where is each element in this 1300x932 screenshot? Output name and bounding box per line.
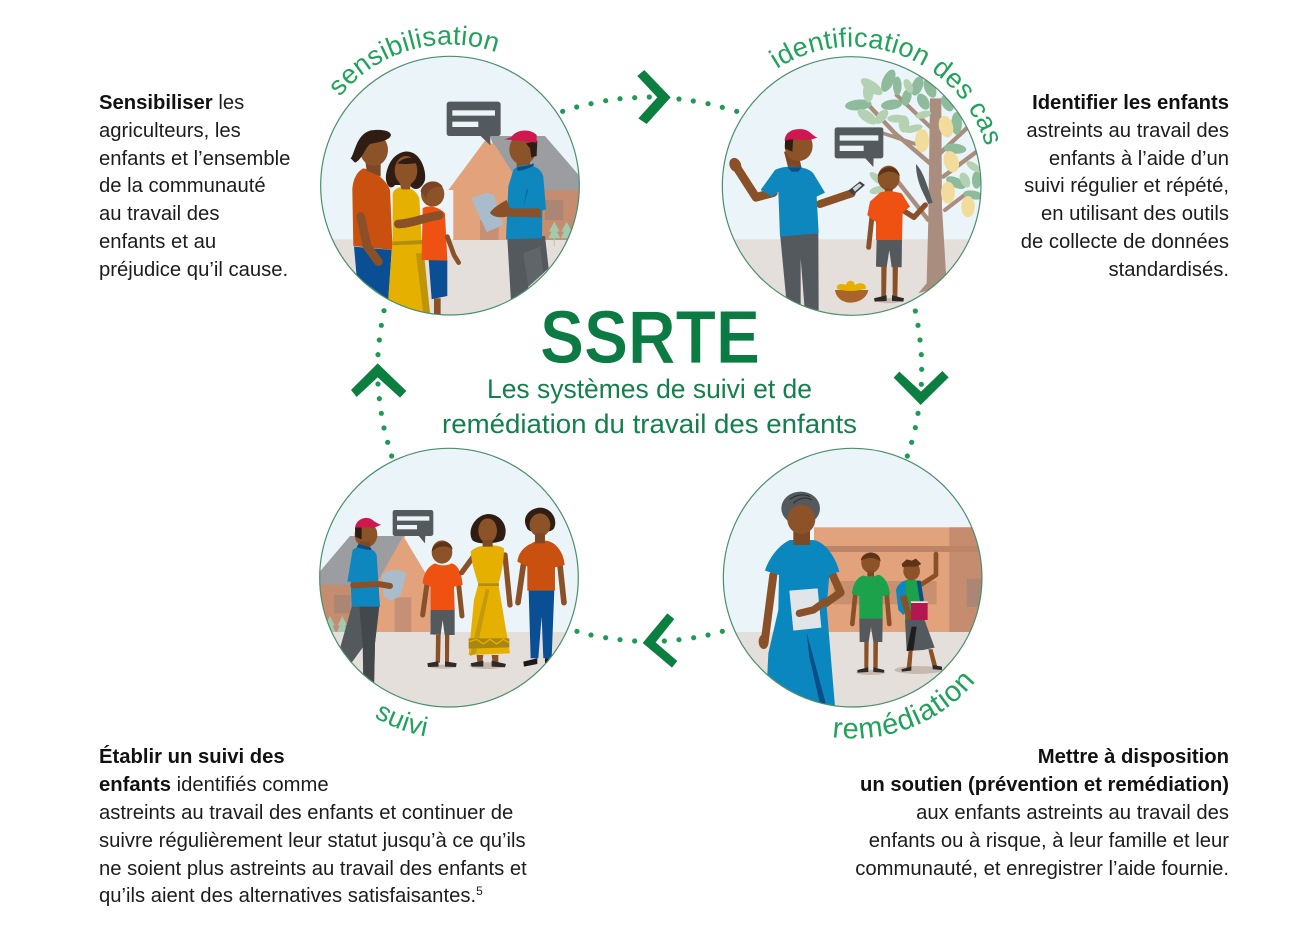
text: remediation: aux enfants astreints au travail des	[916, 802, 1229, 824]
subtitle	[442, 374, 857, 439]
speech bubble	[835, 127, 883, 167]
text: remediation: un soutien (prévention et remédiation)	[860, 774, 1229, 796]
agent	[471, 131, 549, 302]
teacher	[759, 492, 841, 707]
dotted arrow: sensibilisation to identification	[560, 70, 739, 124]
child	[398, 181, 459, 315]
illustration: sensibilisation	[317, 53, 583, 320]
subtitle: remédiation du travail des enfants	[442, 409, 857, 439]
dotted arrow: remediation to suivi	[574, 613, 725, 668]
text: identifier: de collecte de données	[1021, 231, 1229, 253]
label: remediation: remédiation	[834, 674, 974, 739]
agent with phone	[727, 129, 865, 313]
title: SSRTE	[540, 295, 760, 379]
text: identifier: Identifier les enfants	[1032, 92, 1229, 114]
text: suivi: enfants identifiés comme	[99, 774, 329, 796]
father	[517, 508, 565, 667]
speech bubble	[447, 102, 501, 145]
subtitle: Les systèmes de suivi et de	[487, 374, 812, 404]
boy in green	[852, 552, 890, 675]
text: remediation: enfants ou à risque, à leur famille et leur	[869, 830, 1229, 852]
text: sensibiliser: enfants et l’ensemble	[99, 148, 290, 170]
text: suivi	[99, 745, 527, 907]
text: sensibiliser: Sensibiliser les	[99, 92, 244, 114]
mother	[462, 514, 510, 669]
text: remediation	[855, 746, 1229, 880]
illustration: suivi	[317, 447, 583, 713]
label: sensibilisation: sensibilisation	[332, 26, 498, 95]
child with machete	[867, 164, 933, 303]
illustration: remediation	[720, 447, 987, 713]
text: identifier: enfants à l’aide d’un	[1049, 148, 1229, 170]
label: suivi: suivi	[376, 706, 428, 736]
text: suivi: Établir un suivi des	[99, 745, 285, 768]
text: remediation: communauté, et enregistrer l’aide fournie.	[855, 858, 1229, 880]
text: sensibiliser: au travail des	[99, 203, 219, 225]
text: identifier: standardisés.	[1109, 259, 1229, 281]
text: sensibiliser: de la communauté	[99, 175, 266, 197]
text: suivi: ne soient plus astreints au travail des enfants et	[99, 858, 527, 880]
father	[351, 130, 393, 300]
girl with backpack	[894, 554, 942, 674]
illustration: identification des cas	[720, 53, 987, 320]
text: suivi: suivre régulièrement leur statut jusqu’à ce qu’ils	[99, 830, 526, 852]
text: sensibiliser: agriculteurs, les	[99, 120, 241, 142]
text: remediation: Mettre à disposition	[1038, 746, 1229, 768]
text: identifier	[1021, 92, 1229, 281]
text: sensibiliser: enfants et au	[99, 231, 216, 253]
dotted arrow: identification to remediation	[894, 308, 949, 459]
cocoa tree	[845, 67, 984, 293]
dotted arrow: suivi to sensibilisation	[351, 308, 406, 459]
text: suivi: astreints au travail des enfants et continuer de	[99, 802, 513, 824]
basket of cocoa	[835, 281, 868, 303]
child	[423, 540, 463, 669]
agent	[340, 518, 407, 687]
text: sensibiliser: préjudice qu’il cause.	[99, 259, 288, 281]
text: identifier: astreints au travail des	[1026, 120, 1229, 142]
text: sensibiliser	[99, 92, 290, 281]
text: identifier: en utilisant des outils	[1041, 203, 1229, 225]
text: suivi: 5	[476, 884, 483, 898]
text: identifier: suivi régulier et répété,	[1024, 175, 1229, 197]
label: identification des cas: identification des cas	[768, 27, 998, 144]
text: suivi: qu’ils aient des alternatives satisfaisantes.	[99, 885, 476, 907]
speech bubble	[393, 510, 433, 543]
mother	[386, 152, 430, 313]
